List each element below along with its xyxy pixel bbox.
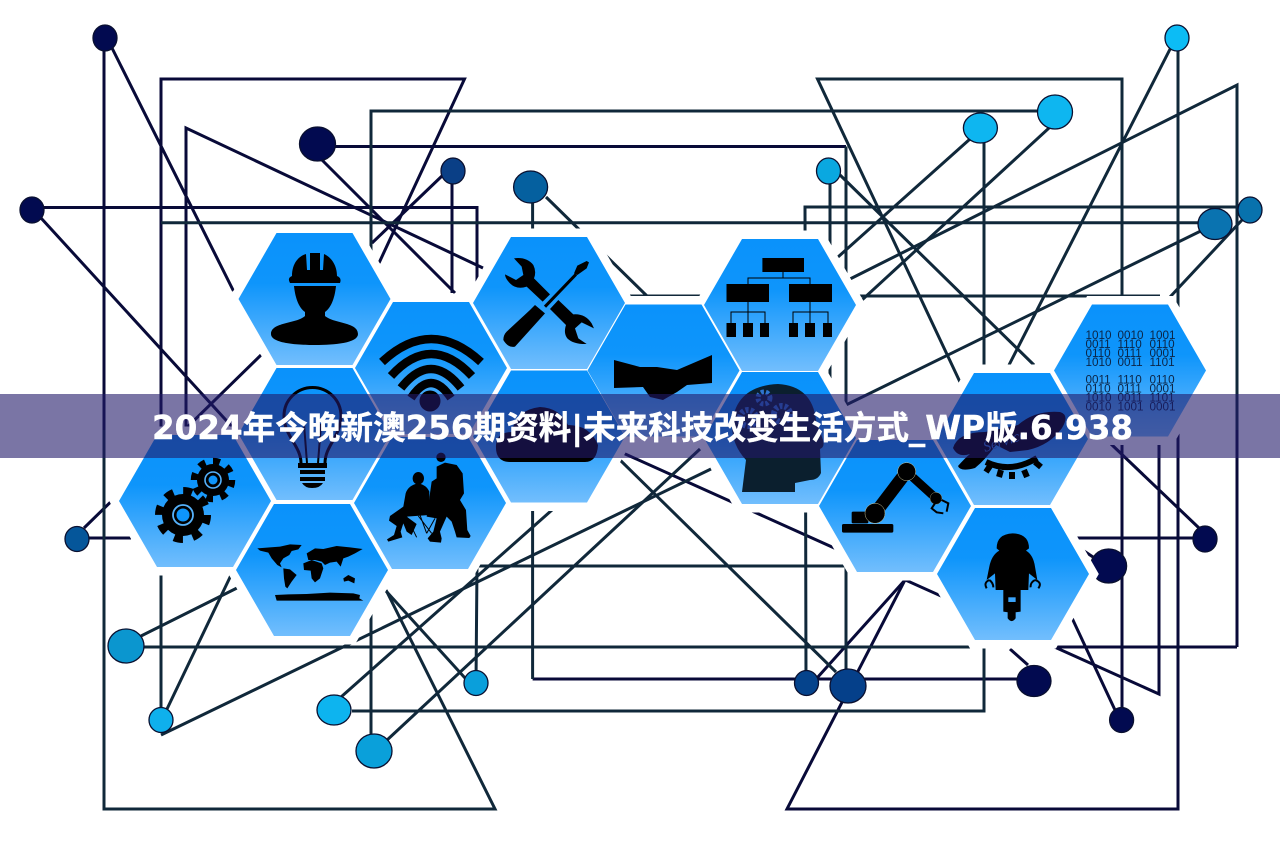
hexagon: binary code: 1001	[1118, 400, 1144, 414]
hexagon: organisation chart	[704, 239, 856, 371]
hexagon: binary code: 1101	[1150, 356, 1175, 369]
hexagon: binary code: 1110	[1118, 374, 1142, 386]
hexagon: binary code: 0110	[1150, 338, 1175, 351]
hexagon: binary code: 0011	[1118, 356, 1143, 369]
hexagon: binary code: 0011	[1118, 392, 1143, 404]
hexagon: cloud	[473, 370, 625, 502]
hexagon: group of people	[354, 437, 506, 569]
hexagon: binary code: 0011	[1086, 338, 1111, 351]
hexagon: binary code: 1010	[1086, 392, 1112, 404]
hexagon: light bulb	[238, 368, 390, 500]
hexagon: binary code: 0001	[1150, 347, 1176, 360]
hexagon: binary code: 0001	[1150, 400, 1176, 414]
hexagon: binary code: 1010	[1086, 329, 1112, 342]
hexagon: binary code: 0111	[1118, 382, 1142, 396]
hexagon: service gear and spanner	[936, 373, 1088, 505]
hexagon: binary code: 0010	[1086, 400, 1112, 414]
hexagon: binary code: 0011	[1086, 374, 1111, 386]
hexagon: robot arm	[819, 440, 971, 572]
hexagon: binary code: 0110	[1086, 347, 1111, 360]
hexagon: service gear and spanner: Service	[981, 427, 1029, 456]
hexagon: handshake	[588, 304, 740, 436]
title banner	[0, 394, 1280, 458]
hexagon: binary code: 0110	[1150, 374, 1175, 386]
hexagon: binary code: 0111	[1118, 347, 1142, 360]
hexagon: binary code: 0001	[1150, 382, 1176, 396]
hexagon: gears	[119, 435, 271, 567]
hexagon: binary code: 1001	[1150, 329, 1176, 342]
hexagon: binary code	[1054, 304, 1206, 436]
hexagon: construction worker	[238, 233, 390, 365]
hexagon: head with gears	[704, 372, 856, 504]
hexagon: world map	[236, 504, 388, 636]
hexagon: robot on wheel	[937, 508, 1089, 640]
hexagon: binary code: 1101	[1150, 392, 1175, 404]
hexagon: binary code: 1110	[1118, 338, 1142, 351]
hexagon: binary code: 0110	[1086, 382, 1111, 396]
hexagon: binary code: 1010	[1086, 356, 1112, 369]
hexagon: wifi signal	[355, 302, 507, 434]
hexagon: binary code: 0010	[1118, 329, 1144, 342]
hexagon: wrench and screwdriver	[473, 237, 625, 369]
title: 2024年今晚新澳256期资料|未来科技改变生活方式_WP版.6.938	[152, 409, 1133, 447]
